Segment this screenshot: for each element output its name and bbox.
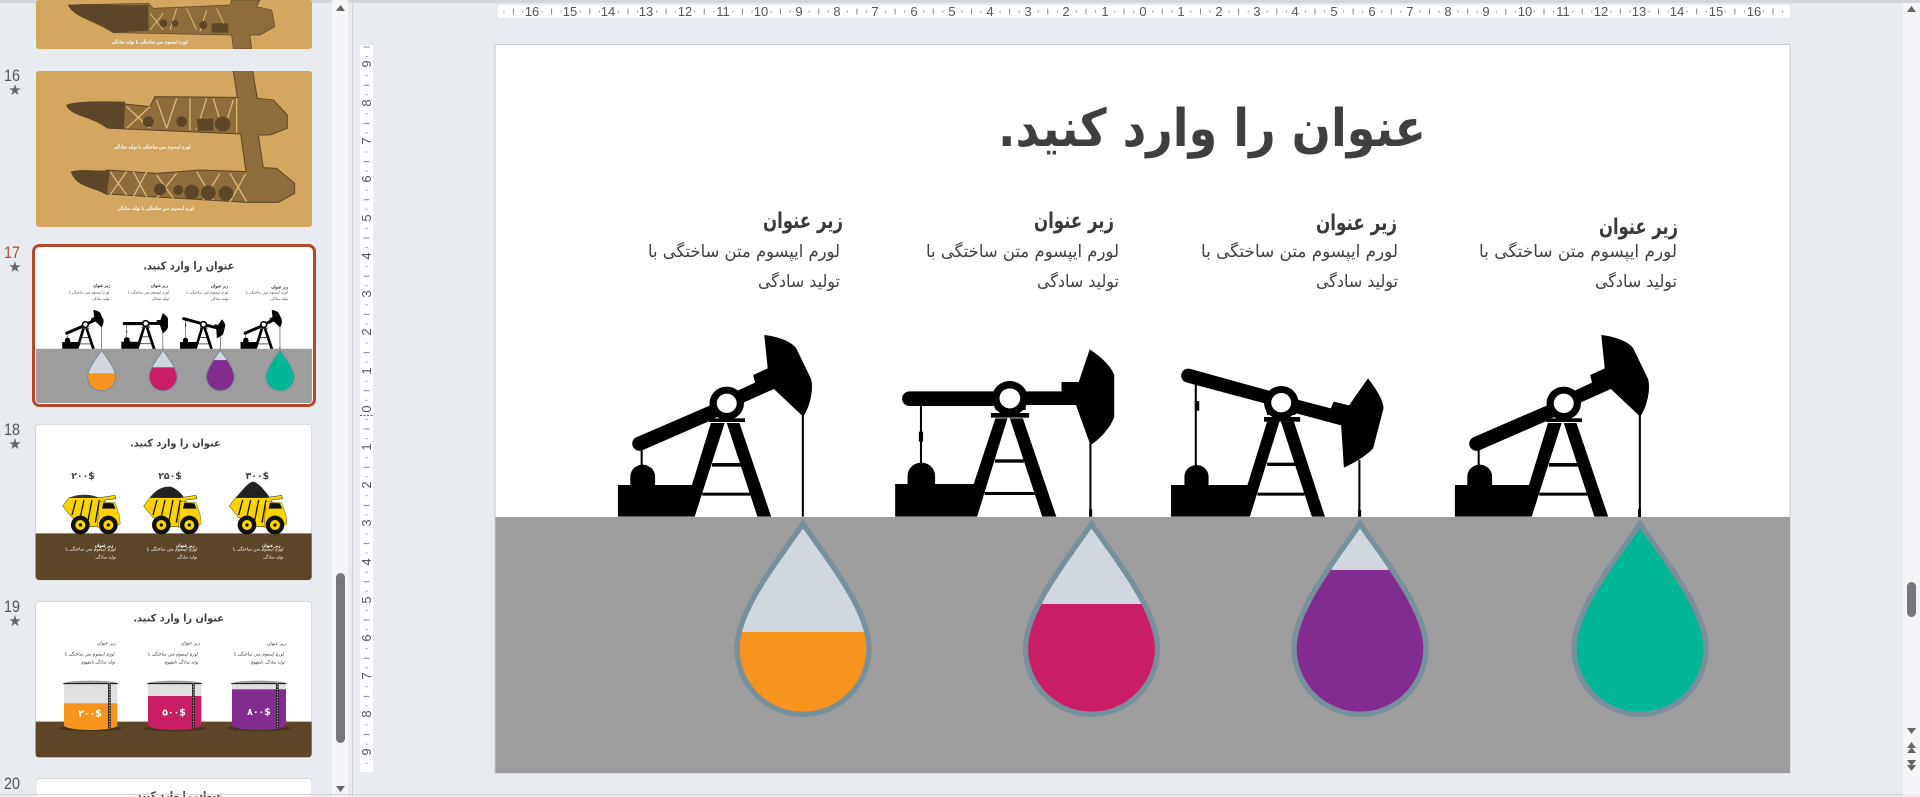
thumbnail 18: trucks: لورم ایپسوم متن ساختگی با [233, 546, 284, 553]
drop 4: teal [1574, 524, 1706, 714]
slide number 17: 17 [4, 243, 20, 262]
thumbnail 19: tanks: لورم ایپسوم متن ساختگی با [65, 650, 115, 657]
thumbnail 18: trucks: زیر عنوان [95, 543, 114, 549]
thumbnail 19: tanks: زیر عنوان [181, 640, 200, 646]
vertical ruler: 5 [359, 596, 374, 604]
horizontal ruler: 11 [716, 4, 730, 19]
vertical ruler: 1 [359, 443, 374, 451]
star marker 19: ★ [8, 612, 22, 630]
vertical ruler: 3 [359, 290, 374, 298]
thumbnail 18: trucks [36, 424, 312, 580]
thumbnail 19: tanks: ۸۰۰$ [247, 707, 271, 718]
pump jacks [618, 335, 1649, 517]
column 1 text [648, 241, 840, 292]
bottom edge [0, 794, 1903, 795]
ground band [496, 517, 1790, 773]
star marker 17: ★ [8, 258, 22, 276]
thumbnail 19: tanks: ۵۰۰$ [162, 708, 186, 719]
vertical ruler: 2 [359, 328, 374, 336]
thumbnail 19: tanks [36, 602, 312, 757]
horizontal ruler: 5 [1330, 4, 1338, 19]
horizontal ruler: 3 [1024, 4, 1032, 19]
slide number 16: 16 [4, 66, 20, 85]
drop 3: purple [1290, 524, 1430, 719]
thumbnail 17: current slide: تولید سادگی [211, 296, 228, 301]
thumbnail 17: current slide: تولید سادگی [152, 296, 169, 301]
star marker 18: ★ [8, 435, 22, 453]
pump jack 1 [618, 335, 812, 517]
thumbnail 17: current slide: لورم ایپسوم متن ساختگی با [69, 289, 110, 295]
star marker 16: ★ [8, 81, 22, 99]
horizontal ruler: 6 [1368, 4, 1376, 19]
slide number 19: 19 [4, 597, 20, 616]
column 3 text: لورم ایپسوم متن ساختگی با [1201, 241, 1398, 262]
thumbnail 16: mine tunnels: لورم ایپسوم متن ساختگی با تولید سادگی [117, 205, 194, 212]
horizontal ruler: 2 [1062, 4, 1070, 19]
thumbnail 19: tanks: عنوان را وارد کنید. [133, 613, 224, 625]
thumbnail 15: mine: لورم ایپسوم متن ساختگی با تولید سادگی [112, 38, 188, 45]
thumbnail 18: trucks: عنوان را وارد کنید. [130, 438, 221, 450]
horizontal ruler: 14 [1670, 4, 1684, 19]
vertical ruler: 9 [359, 60, 374, 68]
pump jack 4 [1455, 335, 1649, 517]
top window edge [0, 0, 1920, 3]
thumbnail 17: current slide: زیر عنوان [271, 284, 288, 290]
horizontal ruler: 10 [754, 4, 768, 19]
pump jack 3 [1171, 369, 1384, 517]
slide number 18: 18 [4, 420, 20, 439]
horizontal ruler: 14 [601, 4, 615, 19]
thumbnail 17: current slide: زیر عنوان [93, 283, 110, 289]
thumbnail 17: current slide: لورم ایپسوم متن ساختگی با [128, 289, 169, 295]
thumbnail 20: partial [36, 778, 312, 797]
thumbnail 17: current slide: عنوان را وارد کنید. [143, 260, 234, 273]
horizontal ruler: 12 [678, 4, 692, 19]
vertical ruler: 6 [359, 175, 374, 183]
thumbnail 18: trucks: زیر عنوان [262, 543, 281, 549]
horizontal ruler: 15 [1709, 4, 1723, 19]
vertical ruler: 7 [359, 137, 374, 145]
horizontal ruler: 1 [1101, 4, 1109, 19]
vertical ruler [359, 45, 374, 772]
column 4 text [1479, 241, 1677, 292]
horizontal ruler: 9 [795, 4, 803, 19]
slide number 20: 20 [4, 774, 20, 793]
horizontal ruler: 4 [1291, 4, 1299, 19]
thumbnail 18: trucks: لورم ایپسوم متن ساختگی با [65, 546, 116, 553]
vertical ruler: 7 [359, 672, 374, 680]
thumbnail 15: mine [36, 0, 312, 49]
horizontal ruler: 12 [1594, 4, 1608, 19]
vertical ruler: 4 [359, 558, 374, 566]
thumbnail 18: trucks: لورم ایپسوم متن ساختگی با [147, 546, 197, 553]
horizontal ruler: 6 [910, 4, 918, 19]
horizontal ruler: 2 [1215, 4, 1223, 19]
drop 2: pink [1022, 524, 1161, 719]
column 2 text: تولید سادگی [1037, 271, 1119, 292]
thumbnail panel [4, 0, 314, 797]
thumbnail 19: tanks: زیر عنوان [267, 641, 286, 647]
column 3 text: تولید سادگی [1316, 271, 1398, 292]
column 4 text: لورم ایپسوم متن ساختگی با [1479, 241, 1677, 262]
pump jack 2 [895, 349, 1114, 517]
thumbnail scrollbar [332, 0, 348, 797]
vertical ruler: 5 [359, 214, 374, 222]
horizontal ruler: 7 [1406, 4, 1414, 19]
column 1 heading: زیر عنوان [763, 209, 843, 234]
thumbnail 17: current slide: زیر عنوان [151, 283, 168, 289]
horizontal ruler: 3 [1253, 4, 1261, 19]
horizontal ruler: 13 [1632, 4, 1646, 19]
horizontal ruler: 9 [1482, 4, 1490, 19]
thumbnail 16: mine tunnels [36, 71, 312, 227]
right scrollbar [1903, 3, 1920, 794]
thumbnail 18: trucks: ۲۰۰$ [71, 471, 95, 482]
panel divider [352, 3, 353, 797]
thumbnail 19: tanks: لورم ایپسوم متن ساختگی با [234, 650, 284, 657]
column 4 text: تولید سادگی [1595, 271, 1677, 292]
slide canvas [495, 44, 1790, 773]
vertical ruler: 0 [359, 405, 374, 413]
thumbnail 16: mine tunnels: لورم ایپسوم متن ساختگی با تولید سادگی [114, 143, 191, 150]
horizontal ruler: 16 [525, 4, 539, 19]
thumbnail 17: current slide [34, 246, 314, 406]
thumbnail 19: tanks: تولید سادگی نامفهوم [165, 658, 199, 665]
vertical ruler: 1 [359, 367, 374, 375]
column 2 text [926, 241, 1119, 292]
vertical ruler: 3 [359, 519, 374, 527]
thumbnail 19: tanks: تولید سادگی نامفهوم [251, 658, 286, 665]
horizontal ruler: 16 [1747, 4, 1761, 19]
thumbnail 18: trucks: تولید سادگی [95, 554, 117, 561]
horizontal ruler: 15 [563, 4, 577, 19]
horizontal ruler: 10 [1518, 4, 1532, 19]
vertical ruler: 6 [359, 634, 374, 642]
vertical ruler: 8 [359, 99, 374, 107]
column 1 text: تولید سادگی [758, 271, 840, 292]
thumbnail 17: current slide: تولید سادگی [270, 296, 288, 301]
thumbnail 19: tanks: لورم ایپسوم متن ساختگی با [148, 650, 198, 657]
drop 1: orange [733, 524, 873, 719]
horizontal ruler: 8 [1444, 4, 1452, 19]
thumbnail 18: trucks: زیر عنوان [176, 543, 195, 549]
thumbnail 17: current slide: لورم ایپسوم متن ساختگی با [186, 289, 228, 295]
column 1 text: لورم ایپسوم متن ساختگی با [648, 241, 840, 262]
thumbnail 19: tanks: زیر عنوان [97, 640, 116, 646]
oil drops [733, 524, 1706, 719]
thumbnail 17: current slide: تولید سادگی [92, 296, 110, 301]
thumbnail 17: current slide: زیر عنوان [211, 284, 228, 290]
column 2 heading: زیر عنوان [1034, 209, 1114, 234]
thumbnail 18: trucks: تولید سادگی [177, 554, 198, 561]
vertical ruler: 9 [359, 748, 374, 756]
horizontal ruler [498, 4, 1790, 19]
vertical ruler: 4 [359, 252, 374, 260]
thumbnail 18: trucks: ۳۰۰$ [246, 471, 269, 482]
thumbnail 19: tanks: تولید سادگی نامفهوم [81, 658, 116, 665]
column 2 text: لورم ایپسوم متن ساختگی با [926, 241, 1119, 262]
thumbnail 18: trucks: ۲۵۰$ [158, 471, 182, 482]
column 3 text [1201, 241, 1398, 292]
horizontal ruler: 4 [986, 4, 994, 19]
title: عنوان را وارد کنید. [998, 99, 1426, 159]
horizontal ruler: 11 [1556, 4, 1570, 19]
vertical ruler: 2 [359, 481, 374, 489]
column 3 heading: زیر عنوان [1316, 211, 1397, 236]
horizontal ruler: 5 [948, 4, 956, 19]
vertical ruler: 8 [359, 710, 374, 718]
thumbnail 18: trucks: تولید سادگی [263, 554, 284, 561]
horizontal ruler: 7 [871, 4, 879, 19]
thumbnail 19: tanks: ۲۰۰$ [78, 709, 102, 720]
horizontal ruler: 0 [1139, 4, 1147, 19]
horizontal ruler: 1 [1177, 4, 1185, 19]
horizontal ruler: 13 [639, 4, 653, 19]
column 4 heading: زیر عنوان [1599, 215, 1678, 240]
horizontal ruler: 8 [833, 4, 841, 19]
thumbnail 17: current slide: لورم ایپسوم متن ساختگی با [246, 289, 288, 295]
